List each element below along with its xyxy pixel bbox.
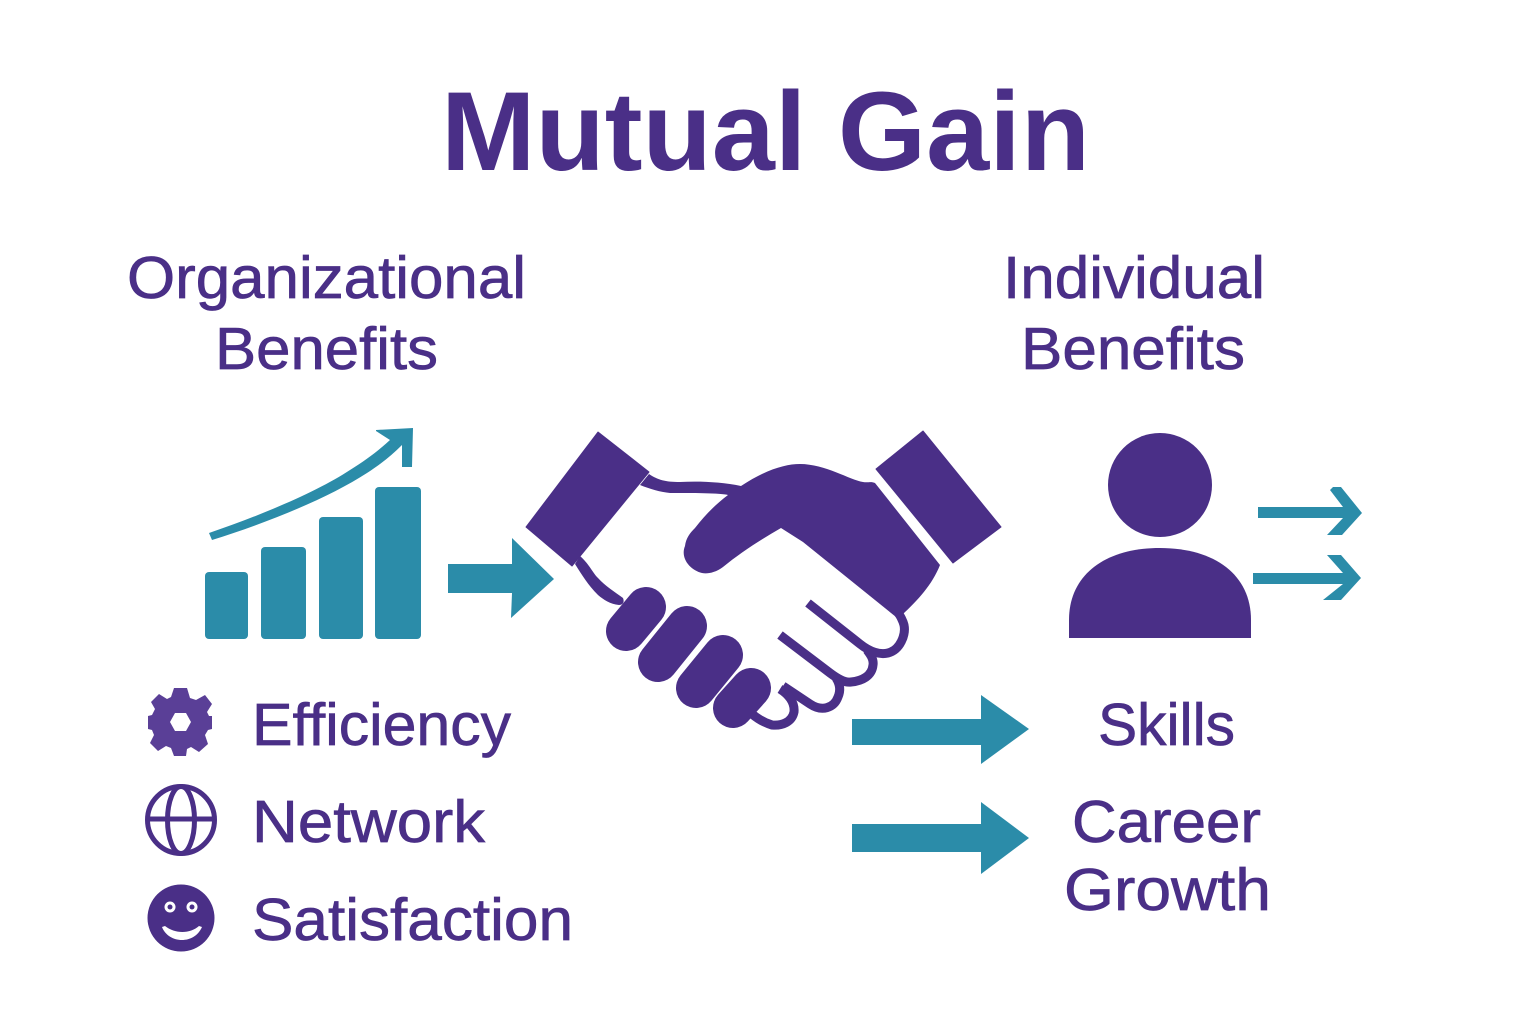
heading: organizational benefits: Benefits: [215, 316, 438, 382]
heading: individual benefits: [1003, 245, 1265, 382]
label: career growth: Growth: [1064, 857, 1271, 923]
label: satisfaction: Satisfaction: [252, 887, 573, 953]
arrow: person lower: [1253, 555, 1361, 600]
icon: handshake: [526, 431, 1001, 725]
arrow: to career growth: [852, 802, 1029, 874]
arrow: person upper: [1258, 487, 1362, 535]
label: efficiency: Efficiency: [252, 692, 512, 758]
title: Mutual Gain: [441, 69, 1090, 194]
label: career growth: [1064, 789, 1271, 923]
icon: globe: [148, 786, 214, 854]
heading: individual benefits: Individual: [1003, 245, 1265, 311]
icon: smiley: [148, 884, 214, 952]
label: network: Network: [252, 789, 486, 855]
label: skills: Skills: [1098, 692, 1235, 758]
label: career growth: Career: [1072, 789, 1261, 855]
icon: growth bar chart: [205, 428, 421, 639]
icon: gear: [148, 688, 212, 756]
icon: person: [1069, 433, 1251, 638]
heading: organizational benefits: Organizational: [127, 245, 526, 311]
arrow: to skills: [852, 695, 1029, 764]
heading: individual benefits: Benefits: [1021, 316, 1245, 382]
heading: organizational benefits: [127, 245, 526, 382]
arrow: organization to handshake: [448, 538, 554, 618]
